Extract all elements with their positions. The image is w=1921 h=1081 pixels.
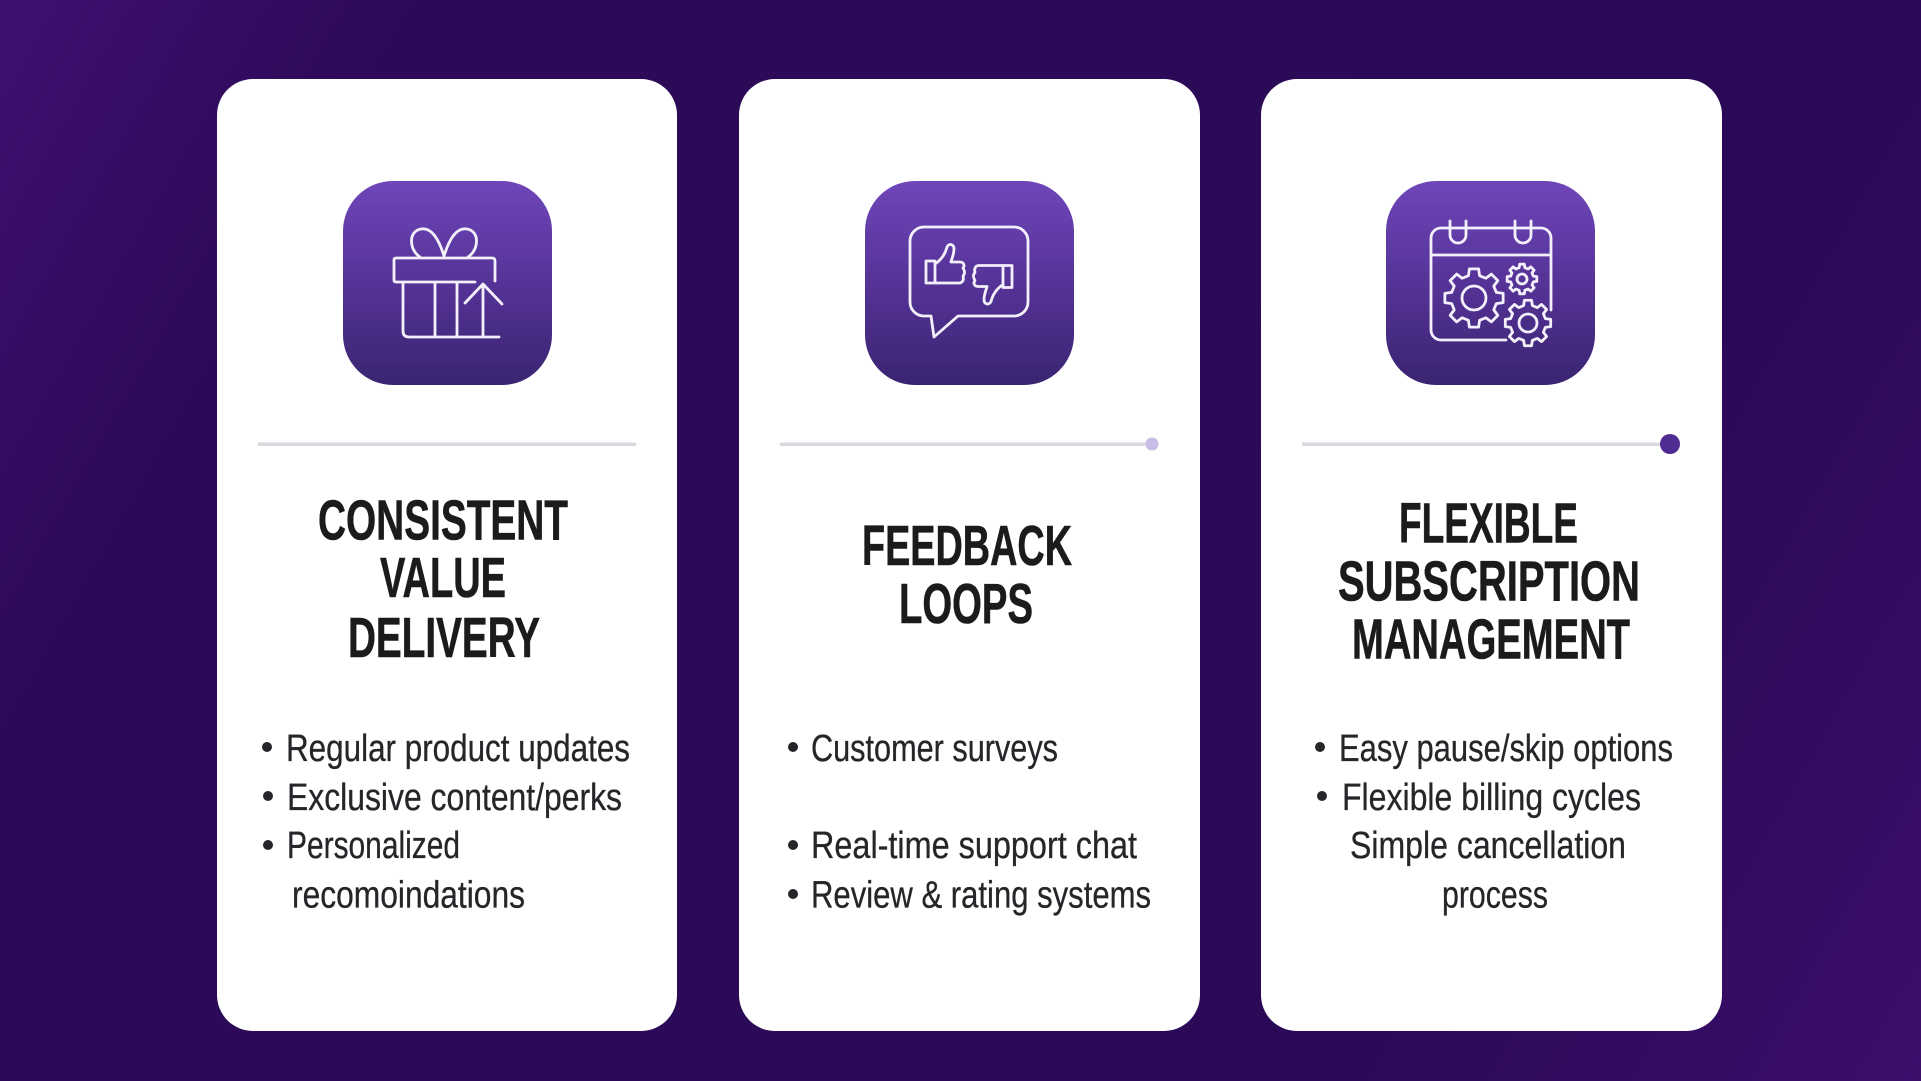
icon: gift with up arrow xyxy=(343,181,552,385)
bullet list: Easy pause/skip options xyxy=(1339,728,1673,770)
panel: flexible subscription management xyxy=(1261,79,1722,1031)
bullet list: Real-time support chat xyxy=(811,825,1137,867)
heading xyxy=(1338,492,1640,672)
heading: CONSISTENT xyxy=(318,488,568,552)
bullet list: Review & rating systems xyxy=(811,874,1151,916)
heading: VALUE xyxy=(380,546,506,610)
bullet list xyxy=(262,728,630,916)
heading: FEEDBACK xyxy=(862,514,1072,578)
bullet list: Customer surveys xyxy=(811,728,1058,770)
bullet list: Exclusive content/perks xyxy=(287,777,622,819)
bullet list: Regular product updates xyxy=(286,728,630,770)
bullet list: Personalized xyxy=(287,825,460,867)
icon: calendar with gears xyxy=(1386,181,1595,385)
divider line with dot xyxy=(1302,434,1680,454)
icon: speech bubble with thumbs xyxy=(865,181,1074,385)
bullet list: process xyxy=(1442,874,1548,916)
card background xyxy=(1261,79,1722,1031)
card background xyxy=(739,79,1200,1031)
heading xyxy=(318,488,568,670)
bullet list: Flexible billing cycles xyxy=(1342,777,1641,819)
heading xyxy=(862,514,1072,636)
heading: LOOPS xyxy=(899,572,1033,636)
panel: consistent value delivery xyxy=(217,79,677,1031)
heading: SUBSCRIPTION xyxy=(1338,550,1640,614)
bullet list: recomoindations xyxy=(292,874,525,916)
bullet list xyxy=(788,728,1151,916)
card background xyxy=(217,79,677,1031)
bullet list xyxy=(1315,728,1673,916)
divider line with faint dot xyxy=(780,438,1158,450)
heading: MANAGEMENT xyxy=(1352,608,1630,672)
divider line xyxy=(258,442,636,446)
panel: feedback loops xyxy=(739,79,1200,1031)
heading: DELIVERY xyxy=(348,606,540,670)
heading: FLEXIBLE xyxy=(1399,492,1578,556)
bullet list: Simple cancellation xyxy=(1350,825,1626,867)
